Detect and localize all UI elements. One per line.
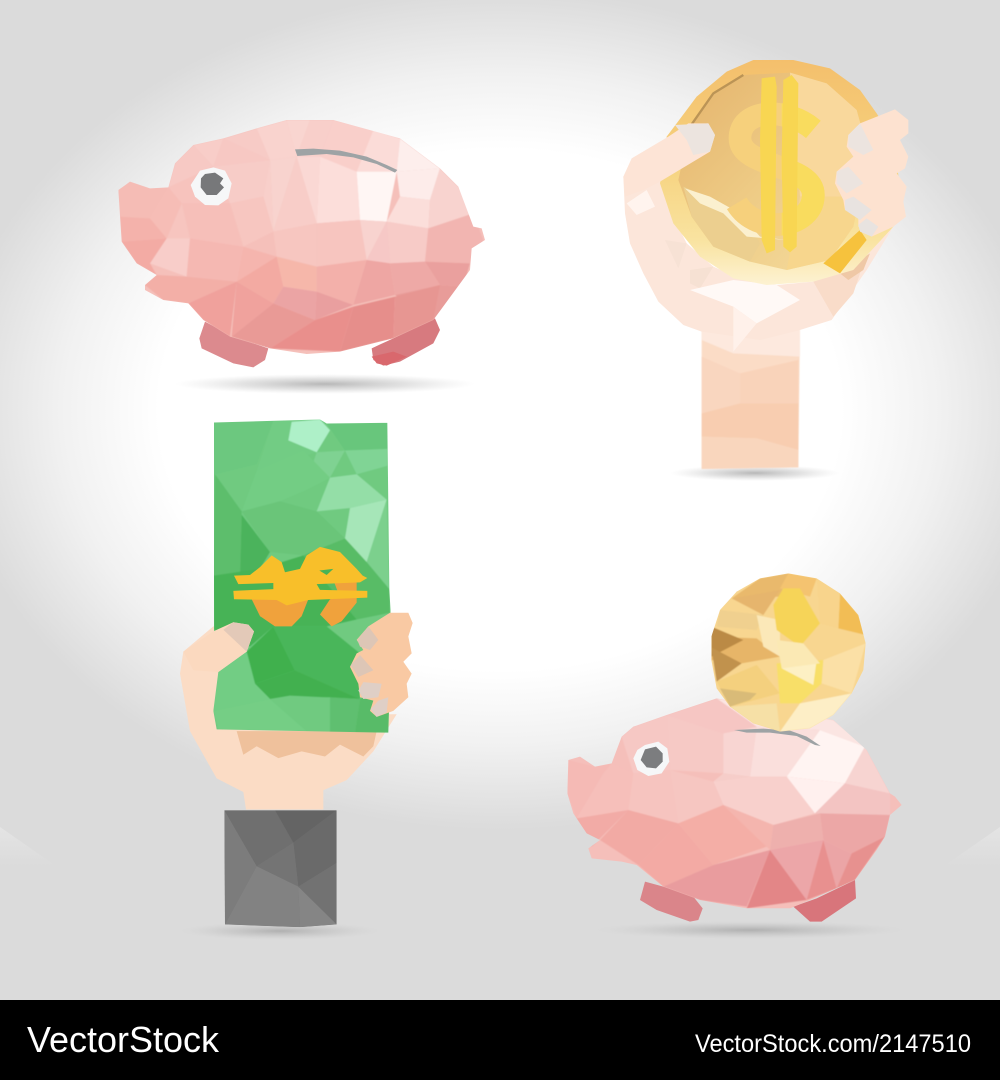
fingers gripping banknote <box>350 613 413 717</box>
illustration: hand holding gold coin <box>623 60 908 469</box>
arm and palm <box>623 177 893 469</box>
footer image id: VectorStock.com/2147510 <box>695 1030 971 1058</box>
ground shadow: top piggy bank <box>175 374 475 394</box>
illustration: piggy bank with falling coin <box>563 572 907 922</box>
pig eye pupil <box>201 173 224 195</box>
thumb <box>623 123 715 197</box>
footer bar <box>0 1000 1000 1080</box>
hand palm <box>180 626 397 810</box>
pig feet <box>640 880 856 922</box>
ground shadow: bottom piggy bank <box>595 921 905 939</box>
ground shadow: hand with banknote <box>180 922 380 940</box>
falling gold coin mesh <box>710 572 867 733</box>
gold coin <box>660 60 900 285</box>
pig eye pupil <box>641 747 663 768</box>
pig feet <box>199 318 440 367</box>
pig eye white <box>191 167 232 205</box>
thumb <box>183 622 254 672</box>
thumb nail <box>223 622 254 652</box>
illustration: low-poly piggy bank <box>113 117 490 367</box>
thumb nail <box>675 123 715 155</box>
gray jacket sleeve <box>223 809 338 929</box>
dollar sign on banknote, turned sideways <box>233 547 367 626</box>
dollar sign on coin <box>737 75 813 253</box>
pig coin slot <box>734 729 821 746</box>
ground shadow: hand with coin <box>670 465 840 481</box>
pig coin slot <box>295 149 397 173</box>
illustration: hand holding green banknote <box>180 417 413 929</box>
footer brand name: VectorStock <box>27 1019 220 1060</box>
fingers gripping coin <box>835 109 908 237</box>
pig body mesh <box>113 117 490 357</box>
pig eye white <box>633 742 669 776</box>
green banknote <box>210 417 393 738</box>
shaded palm under banknote <box>237 731 377 758</box>
pig body mesh <box>563 693 907 913</box>
